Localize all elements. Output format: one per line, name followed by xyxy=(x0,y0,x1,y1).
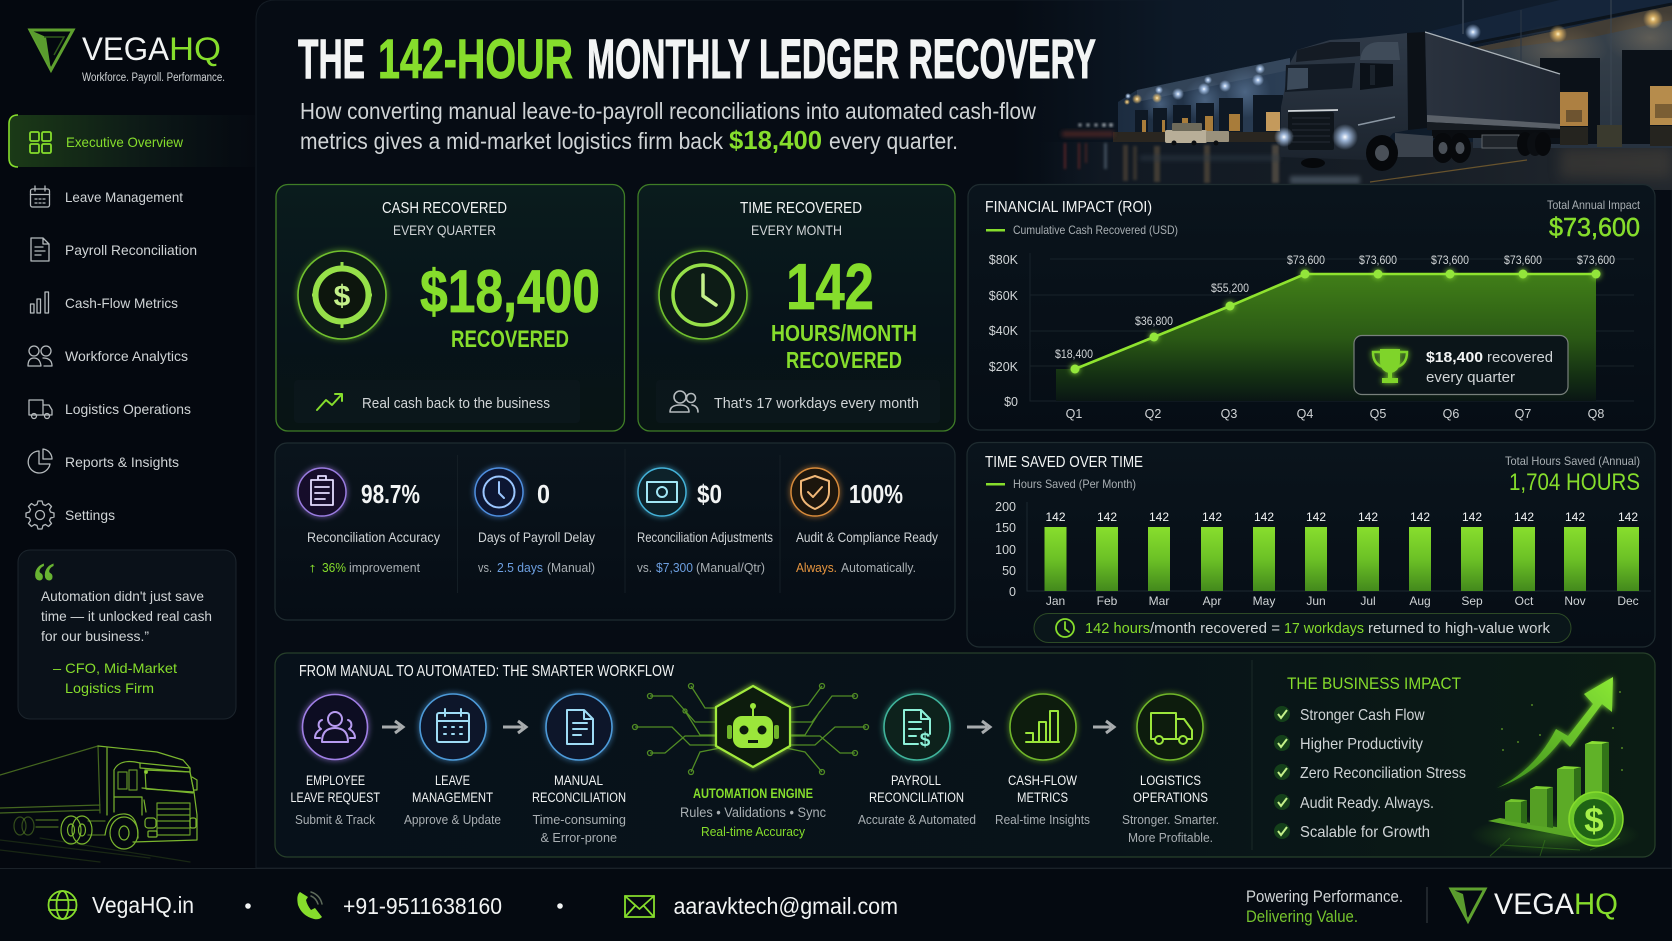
icon: clock xyxy=(659,251,747,339)
month labels xyxy=(1046,594,1639,608)
subtitle: How converting manual leave-to-payroll reconciliations into automated cash-flow xyxy=(300,98,1036,124)
stat: audit and compliance ready: Automatically. xyxy=(841,560,916,575)
bar values: 142 xyxy=(1097,510,1117,524)
card footer strip xyxy=(656,380,940,423)
footer logo: VEGA xyxy=(1494,888,1574,921)
icon: robot in hexagon xyxy=(716,686,790,767)
callout pill: hours recovered xyxy=(1034,614,1571,642)
nav item: Settings: Settings xyxy=(65,507,115,523)
step: leave management: LEAVE xyxy=(435,773,470,788)
panel: time recovered xyxy=(638,184,955,431)
y axis labels: $40K xyxy=(989,324,1019,338)
nav item: Cash-Flow Metrics xyxy=(30,292,178,313)
step: leave management: MANAGEMENT xyxy=(412,790,493,805)
stat: audit and compliance ready: Audit & Compliance Ready xyxy=(796,529,938,545)
stat: reconciliation accuracy: 98.7% xyxy=(361,479,420,509)
automation engine: Rules • Validations • Sync xyxy=(680,805,826,820)
quote attribution xyxy=(53,660,177,696)
card heading: EVERY QUARTER xyxy=(393,222,496,238)
callout: recovered every quarter: $18,400 xyxy=(1426,349,1483,366)
impact checklist: Higher Productivity xyxy=(1300,736,1423,753)
step: logistics operations: More Profitable. xyxy=(1128,830,1213,845)
nav item: Workforce Analytics: Workforce Analytics xyxy=(65,348,188,364)
y axis labels: 50 xyxy=(1002,564,1016,578)
stat: days of payroll delay xyxy=(475,468,595,575)
step: logistics operations: LOGISTICS xyxy=(1140,773,1201,788)
arrow xyxy=(1093,721,1114,733)
callout: recovered every quarter: recovered xyxy=(1487,349,1553,366)
panel: time saved bar chart xyxy=(967,442,1655,647)
metric: $18,400: $18,400 xyxy=(420,258,600,325)
nav item: Reports & Insights xyxy=(28,449,179,473)
icon: growth chart with coin: $ xyxy=(1584,801,1604,840)
title: THE xyxy=(298,27,365,90)
stat: reconciliation accuracy: ↑ xyxy=(308,560,317,575)
data labels: $73,600 xyxy=(1359,253,1397,267)
subtitle: $18,400 xyxy=(729,125,822,155)
quote text xyxy=(41,588,212,644)
automation engine: Real-time Accuracy xyxy=(701,824,805,839)
icon: clipboard xyxy=(298,468,346,516)
step: cash-flow metrics: METRICS xyxy=(1017,790,1068,805)
data labels: $73,600 xyxy=(1431,253,1469,267)
chart legend: Cumulative Cash Recovered (USD) xyxy=(1013,223,1178,237)
data labels: $36,800 xyxy=(1135,314,1173,328)
annual hours total: 1,704 HOURS xyxy=(1509,469,1640,496)
month labels: Sep xyxy=(1461,594,1483,608)
stat: reconciliation accuracy: Reconciliation Accuracy xyxy=(307,529,440,545)
chart heading: TIME SAVED OVER TIME xyxy=(985,454,1143,471)
logo mark xyxy=(30,30,73,70)
step: employee leave request: Submit & Track xyxy=(295,812,375,827)
y axis labels: $60K xyxy=(989,289,1019,303)
stat: audit and compliance ready: Always. xyxy=(796,560,837,575)
arrow xyxy=(967,721,990,733)
title: 142-HOUR xyxy=(378,27,573,90)
data labels: $55,200 xyxy=(1211,281,1249,295)
metric caption: RECOVERED xyxy=(786,347,902,373)
x axis labels: Q7 xyxy=(1515,407,1531,421)
footer tagline: Delivering Value. xyxy=(1246,907,1358,926)
bar values: 142 xyxy=(1410,510,1430,524)
x axis labels: Q1 xyxy=(1066,407,1082,421)
step: manual reconciliation: Time-consuming xyxy=(532,812,626,827)
month labels: Aug xyxy=(1409,594,1431,608)
stat: reconciliation adjustments: vs. xyxy=(637,560,652,575)
step: payroll reconciliation xyxy=(858,694,976,827)
stat: reconciliation adjustments: (Manual/Qtr) xyxy=(696,560,765,575)
quote mark: “ xyxy=(33,552,55,614)
title xyxy=(298,27,1096,90)
nav item: Executive Overview (active): Executive Overview xyxy=(66,134,184,150)
logo tagline: Workforce. Payroll. Performance. xyxy=(82,72,225,84)
nav item: Logistics Operations xyxy=(29,400,191,418)
y axis labels: 0 xyxy=(1009,585,1016,599)
month labels: Dec xyxy=(1617,594,1639,608)
footer tagline xyxy=(1246,887,1403,926)
footer email: aaravktech@gmail.com xyxy=(674,893,898,919)
month labels: Jun xyxy=(1306,594,1326,608)
stat: reconciliation accuracy xyxy=(298,468,440,575)
stat: days of payroll delay: 2.5 days xyxy=(497,560,543,575)
y axis labels: $20K xyxy=(989,360,1019,374)
nav item: Leave Management: Leave Management xyxy=(65,189,183,205)
main content background xyxy=(256,0,1672,868)
nav item: Leave Management xyxy=(30,186,183,207)
callout pill: hours recovered: /month recovered = xyxy=(1150,620,1280,637)
quote text: time — it unlocked real cash xyxy=(41,608,212,624)
stat: reconciliation adjustments xyxy=(637,468,773,575)
chart heading: FINANCIAL IMPACT (ROI) xyxy=(985,199,1152,216)
step: manual reconciliation: RECONCILIATION xyxy=(532,790,626,805)
icon: clock xyxy=(475,468,523,516)
step: employee leave request xyxy=(290,694,380,827)
x axis labels: Q5 xyxy=(1370,407,1386,421)
footer website: VegaHQ.in xyxy=(92,892,194,918)
data labels: $18,400 xyxy=(1055,347,1093,361)
step: cash-flow metrics: CASH-FLOW xyxy=(1008,773,1077,788)
bar values: 142 xyxy=(1202,510,1222,524)
quote attribution: – CFO, Mid-Market xyxy=(53,660,177,676)
quote text: for our business.” xyxy=(41,628,149,644)
month labels: May xyxy=(1253,594,1275,608)
impact checklist: Stronger Cash Flow xyxy=(1300,707,1425,724)
month labels: Jan xyxy=(1046,594,1065,608)
month labels: Oct xyxy=(1515,594,1534,608)
icon: dollar stopwatch xyxy=(298,251,386,339)
callout pill: hours recovered: 17 workdays xyxy=(1284,620,1364,637)
data line xyxy=(1075,274,1596,369)
annual hours total: Total Hours Saved (Annual) xyxy=(1505,454,1640,468)
step: logistics operations: OPERATIONS xyxy=(1133,790,1208,805)
left warehouse xyxy=(1062,58,1290,142)
parked van xyxy=(1165,123,1229,146)
icon: outline truck xyxy=(0,746,197,862)
step: manual reconciliation xyxy=(532,694,626,845)
title: MONTHLY LEDGER RECOVERY xyxy=(587,27,1096,90)
bar values: 142 xyxy=(1618,510,1638,524)
data labels: $73,600 xyxy=(1287,253,1325,267)
nav item: Settings xyxy=(26,501,115,529)
step: payroll reconciliation: $ xyxy=(920,730,931,751)
footer tagline: Powering Performance. xyxy=(1246,887,1403,906)
hero photo: truck at loading dock xyxy=(1010,0,1672,190)
month labels: Feb xyxy=(1097,594,1118,608)
icon: growth chart with coin xyxy=(1470,677,1640,856)
x axis labels: Q2 xyxy=(1145,407,1161,421)
month labels: Jul xyxy=(1360,594,1376,608)
step: logistics operations: Stronger. Smarter. xyxy=(1122,812,1219,827)
y axis labels: 200 xyxy=(995,500,1016,514)
bar chart xyxy=(995,500,1651,608)
month labels: Apr xyxy=(1203,594,1221,608)
stat: days of payroll delay: vs. xyxy=(478,560,492,575)
annual hours total xyxy=(1505,454,1640,496)
step: manual reconciliation: & Error-prone xyxy=(540,830,617,845)
impact checklist xyxy=(1274,706,1466,841)
panel: workflow xyxy=(275,653,1655,857)
subtitle: metrics gives a mid-market logistics firm back xyxy=(300,128,723,154)
testimonial quote card xyxy=(18,550,236,719)
arrow xyxy=(503,721,526,733)
subtitle: every quarter. xyxy=(829,128,958,154)
y axis labels: 150 xyxy=(995,521,1016,535)
stat: days of payroll delay: 0 xyxy=(537,479,550,509)
callout: recovered every quarter xyxy=(1354,336,1568,394)
data labels: $73,600 xyxy=(1504,253,1542,267)
truck cab xyxy=(1274,32,1433,171)
arrow xyxy=(382,721,403,733)
chart legend: Hours Saved (Per Month) xyxy=(1013,477,1136,491)
annual impact total xyxy=(1547,198,1641,242)
card heading: CASH RECOVERED xyxy=(382,200,507,217)
step: payroll reconciliation: PAYROLL xyxy=(891,773,941,788)
workflow heading: FROM MANUAL TO AUTOMATED: THE SMARTER WORKFLOW xyxy=(299,663,674,680)
quote text: Automation didn't just save xyxy=(41,588,204,604)
panel: cash recovered xyxy=(276,184,624,431)
bar values: 142 xyxy=(1462,510,1482,524)
step: payroll reconciliation: RECONCILIATION xyxy=(869,790,964,805)
bars xyxy=(1044,527,1639,591)
bar values: 142 xyxy=(1306,510,1326,524)
y axis labels xyxy=(989,253,1019,409)
card heading: EVERY MONTH xyxy=(751,222,842,238)
stat: audit and compliance ready: 100% xyxy=(849,479,903,509)
metric: 142: 142 xyxy=(786,250,874,323)
footer logo xyxy=(1451,888,1618,921)
separator dot xyxy=(557,903,563,909)
month labels: Nov xyxy=(1564,594,1586,608)
x axis labels: Q8 xyxy=(1588,407,1604,421)
step: employee leave request: EMPLOYEE xyxy=(306,773,365,788)
stat: reconciliation adjustments: Reconciliation Adjustments xyxy=(637,529,773,545)
step: employee leave request: LEAVE REQUEST xyxy=(290,790,380,805)
bar values: 142 xyxy=(1358,510,1378,524)
data labels xyxy=(1055,253,1615,361)
data labels: $73,600 xyxy=(1577,253,1615,267)
nav item: Logistics Operations: Logistics Operations xyxy=(65,401,191,417)
stat: reconciliation accuracy: improvement xyxy=(349,560,420,575)
step: cash-flow metrics xyxy=(995,694,1090,827)
card footer strip: Real cash back to the business xyxy=(362,395,550,412)
right warehouse xyxy=(1410,0,1672,148)
step: logistics operations xyxy=(1122,694,1219,845)
step: leave management xyxy=(404,694,501,827)
x axis labels: Q4 xyxy=(1297,407,1313,421)
bar values: 142 xyxy=(1514,510,1534,524)
footer xyxy=(0,868,1672,941)
y axis labels xyxy=(995,500,1016,599)
impact checklist: Audit Ready. Always. xyxy=(1300,795,1434,812)
navigation: sidebar menu xyxy=(9,115,256,529)
y axis labels: $80K xyxy=(989,253,1019,267)
stat: days of payroll delay: (Manual) xyxy=(547,560,595,575)
bar values: 142 xyxy=(1045,510,1066,524)
x axis labels: Q6 xyxy=(1443,407,1459,421)
bar values xyxy=(1045,510,1638,524)
step: manual reconciliation: MANUAL xyxy=(554,773,603,788)
stat: audit and compliance ready xyxy=(791,468,938,575)
y axis labels: $0 xyxy=(1004,395,1018,409)
impact heading: THE BUSINESS IMPACT xyxy=(1287,674,1461,693)
callout pill: hours recovered: 142 hours xyxy=(1085,620,1150,637)
wet ground xyxy=(1040,142,1672,190)
footer phone: +91-9511638160 xyxy=(343,893,502,919)
subtitle xyxy=(300,98,1036,155)
business impact section xyxy=(1274,674,1640,856)
icon: trophy xyxy=(1373,349,1407,383)
bar values: 142 xyxy=(1254,510,1274,524)
bar values: 142 xyxy=(1149,510,1169,524)
panel: key performance stats xyxy=(275,443,955,620)
truck trailer xyxy=(1425,32,1560,163)
stat: reconciliation adjustments: $7,300 xyxy=(656,560,693,575)
icon: shield xyxy=(791,468,839,516)
step: payroll reconciliation: Accurate & Automated xyxy=(858,812,976,827)
nav item: Payroll Reconciliation xyxy=(31,238,197,261)
area under curve xyxy=(1056,274,1596,401)
separator dot xyxy=(245,903,251,909)
metric caption: HOURS/MONTH xyxy=(771,320,917,346)
footer logo: HQ xyxy=(1574,888,1618,921)
metric caption xyxy=(771,320,917,373)
card footer strip: That's 17 workdays every month xyxy=(714,395,919,412)
circuit lines xyxy=(632,684,868,774)
card heading xyxy=(740,200,862,238)
automation engine xyxy=(632,684,868,839)
logo wordmark: VEGA xyxy=(82,31,170,67)
metric caption: RECOVERED xyxy=(451,326,569,353)
nav item: Reports & Insights: Reports & Insights xyxy=(65,454,179,470)
panel: financial impact chart xyxy=(968,184,1655,430)
annual impact total: $73,600 xyxy=(1549,212,1640,242)
nav item: Workforce Analytics xyxy=(28,346,188,366)
nav item: Executive Overview (active) xyxy=(9,115,256,167)
y axis labels: 100 xyxy=(995,543,1016,557)
impact checklist: Scalable for Growth xyxy=(1300,824,1430,841)
card heading: TIME RECOVERED xyxy=(740,200,862,217)
nav item: Payroll Reconciliation: Payroll Reconciliation xyxy=(65,242,197,258)
impact checklist: Zero Reconciliation Stress xyxy=(1300,765,1466,782)
step: leave management: Approve & Update xyxy=(404,812,501,827)
stat: reconciliation adjustments: $0 xyxy=(697,479,722,509)
x axis labels xyxy=(1066,407,1604,421)
sidebar logo xyxy=(30,30,225,84)
bar values: 142 xyxy=(1565,510,1585,524)
icon: banknote xyxy=(638,468,686,516)
callout: recovered every quarter: every quarter xyxy=(1426,369,1515,386)
callout pill: hours recovered: returned to high-value work xyxy=(1368,620,1551,637)
step: cash-flow metrics: Real-time Insights xyxy=(995,812,1090,827)
stat: days of payroll delay: Days of Payroll Delay xyxy=(478,529,595,545)
nav item: Cash-Flow Metrics: Cash-Flow Metrics xyxy=(65,295,178,311)
card heading xyxy=(382,200,507,238)
line chart xyxy=(989,253,1634,421)
footer website xyxy=(48,891,194,919)
icon: dollar stopwatch: $ xyxy=(334,280,351,313)
month labels: Mar xyxy=(1149,594,1169,608)
quote attribution: Logistics Firm xyxy=(65,680,154,696)
stat: reconciliation accuracy: 36% xyxy=(322,560,346,575)
card footer strip xyxy=(294,380,580,423)
footer phone xyxy=(297,892,502,919)
annual impact total: Total Annual Impact xyxy=(1547,198,1641,212)
left warehouse lights xyxy=(1124,64,1265,105)
sidebar logo: HQ xyxy=(169,31,221,67)
x axis labels: Q3 xyxy=(1221,407,1237,421)
data points xyxy=(1070,270,1600,374)
automation engine: AUTOMATION ENGINE xyxy=(693,785,813,801)
